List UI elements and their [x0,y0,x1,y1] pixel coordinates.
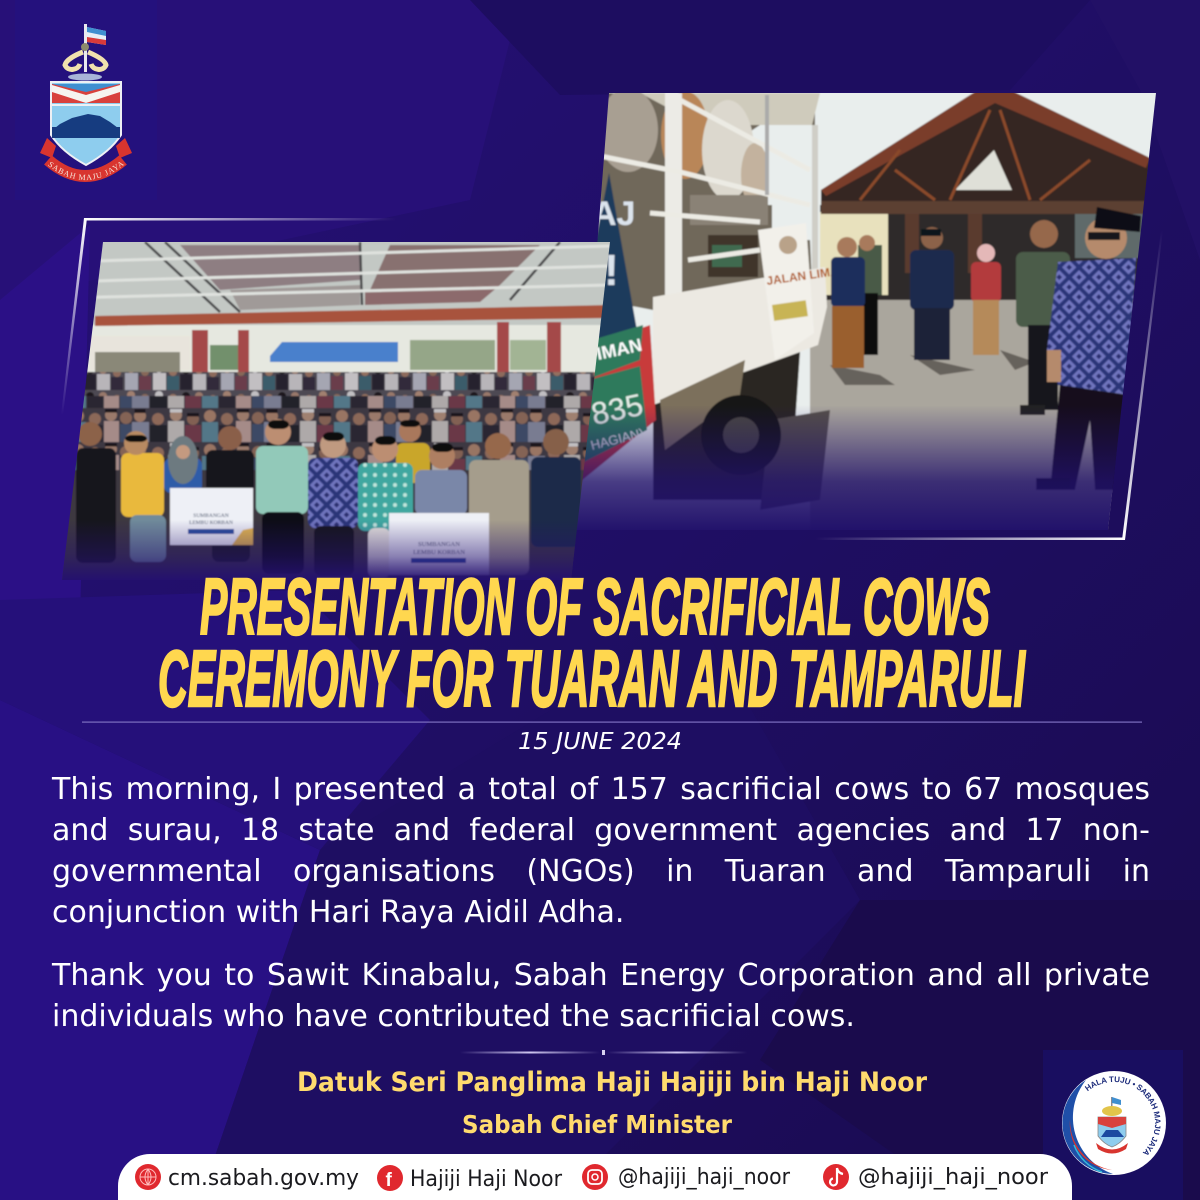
website: cm.sabah.gov.my [168,1166,359,1191]
facebook name: Hajiji Haji Noor [410,1167,563,1192]
signatory name: Datuk Seri Panglima Haji Hajiji bin Haji Noor [297,1067,928,1098]
badge: Hala Tuju Sabah Maju Jaya [1062,1071,1166,1175]
paragraph 1: conjunction with Hari Raya Aidil Adha. [52,895,624,930]
truck standee banner: HAGIAN) [589,425,645,453]
truck standee banner: IMAN [595,335,644,364]
paragraph 1 [52,772,1150,930]
paragraph 1: and surau, 18 state and federal government agencies and 17 non- [52,813,1150,848]
instagram handle: @hajiji_haji_noor [618,1165,791,1190]
icon: facebook: f [386,1170,392,1191]
photo frame: left accent [61,218,396,415]
truck standee banner: 835 [588,387,646,432]
state crest: SABAH MAJU JAYA [48,162,124,180]
presentation board 2: SUMBANGAN [418,541,460,548]
body text [52,772,1150,1034]
icon: website globe [135,1164,161,1190]
badge: Hala Tuju Sabah Maju Jaya: HALA TUJU • SABAH MAJU JAYA [1084,1076,1160,1155]
photo frame: right accent [815,230,1163,540]
front row guests [76,419,581,578]
truck cage with cows [598,88,820,310]
crowd [65,371,595,555]
paragraph 2: Thank you to Sawit Kinabalu, Sabah Energy Corporation and all private [52,958,1150,993]
tiktok handle: @hajiji_haji_noor [858,1165,1049,1190]
paragraph 1: governmental organisations (NGOs) in Tuaran and Tamparuli in [52,854,1150,889]
date: 15 JUNE 2024 [518,729,682,755]
Chief Minister in batik shirt [1036,207,1141,490]
icon: instagram [582,1164,608,1190]
icon: facebook [377,1165,403,1191]
truck standee banner [580,173,656,482]
presentation board 2: LEMBU KORBAN [413,549,465,556]
truck standee banner: ! [604,246,619,295]
photo: truck with sacrificial cows and Chief Minister [575,88,1165,535]
presentation board 2 [389,513,489,575]
signature divider [460,1050,747,1055]
presentation board 1: SUMBANGAN [193,513,229,519]
presentation board 1 [170,488,253,545]
signatory role: Sabah Chief Minister [462,1110,733,1139]
state crest [40,24,132,182]
paragraph 2: individuals who have contributed the sacrificial cows. [52,999,855,1034]
title divider [82,722,1142,723]
photo: group with recipients [60,240,612,582]
photo: truck with sacrificial cows and Chief Minister: JALAN LIMA [765,264,840,288]
bystanders [830,220,1070,415]
truck standee banner: AJ [592,195,635,233]
presentation board 1: LEMBU KORBAN [189,520,233,526]
title [158,562,1026,723]
footer contact bar [118,1154,1072,1200]
icon: tiktok [823,1164,849,1190]
paragraph 2 [52,958,1150,1034]
paragraph 1: This morning, I presented a total of 157 sacrificial cows to 67 mosques [52,772,1150,807]
